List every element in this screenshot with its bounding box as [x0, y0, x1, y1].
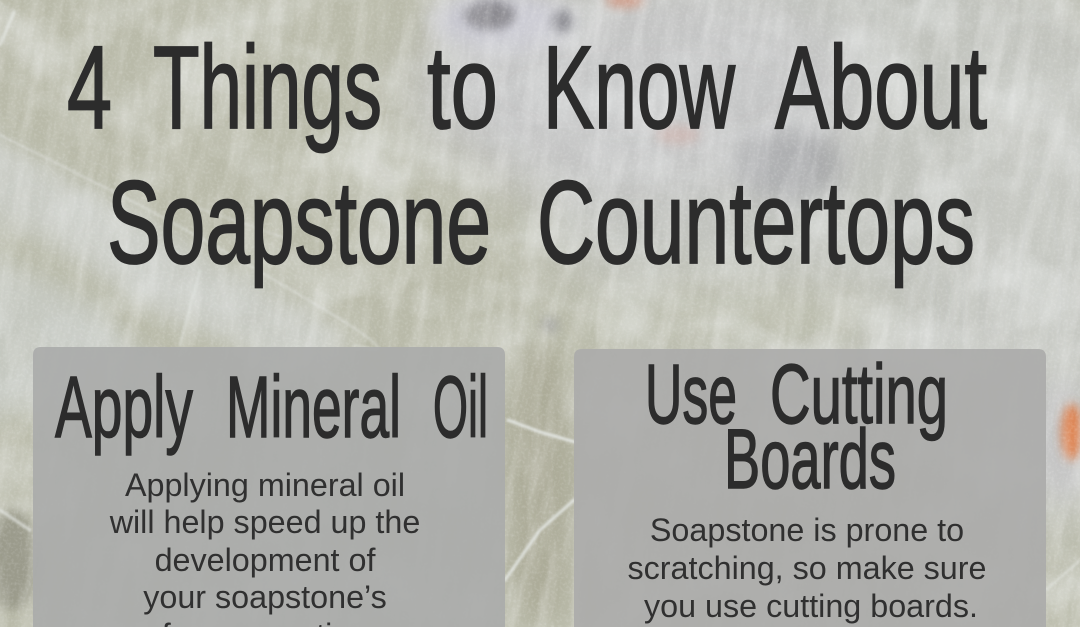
body text: mineral oil (last line is clipped at the page edge): your soapstone’s	[143, 579, 387, 615]
title: Know	[543, 22, 736, 154]
body text: mineral oil (last line is clipped at the page edge): Applying mineral oil	[125, 467, 405, 503]
heading: use cutting boards: Use	[645, 347, 737, 441]
heading: apply mineral oil: Mineral	[226, 359, 401, 456]
panel background: right	[574, 349, 1046, 627]
title: to	[427, 22, 498, 154]
body text: cutting boards: you use cutting boards.	[644, 588, 978, 624]
body text: cutting boards	[627, 512, 987, 624]
heading: apply mineral oil: Apply	[55, 359, 193, 456]
body text: cutting boards: scratching, so make sure	[627, 550, 987, 586]
heading: use cutting boards: Boards	[724, 412, 896, 506]
title: Soapstone	[107, 157, 491, 289]
title	[67, 22, 987, 289]
body text: mineral oil (last line is clipped at the page edge): development of	[155, 542, 376, 578]
title: 4	[67, 22, 112, 154]
body text: mineral oil (last line is clipped at the page edge): will help speed up the	[109, 504, 420, 540]
title: About	[775, 22, 987, 154]
heading: apply mineral oil: Oil	[433, 359, 488, 456]
body text: mineral oil (last line is clipped at the page edge)	[109, 467, 420, 627]
heading: use cutting boards: Cutting	[770, 347, 948, 441]
heading: use cutting boards	[645, 347, 948, 506]
body text: cutting boards: Soapstone is prone to	[650, 512, 964, 548]
panel background: left	[33, 347, 505, 627]
panel: apply mineral oil	[33, 347, 505, 627]
panel: use cutting boards	[574, 347, 1046, 627]
heading: apply mineral oil	[55, 359, 488, 456]
title: Things	[153, 22, 382, 154]
